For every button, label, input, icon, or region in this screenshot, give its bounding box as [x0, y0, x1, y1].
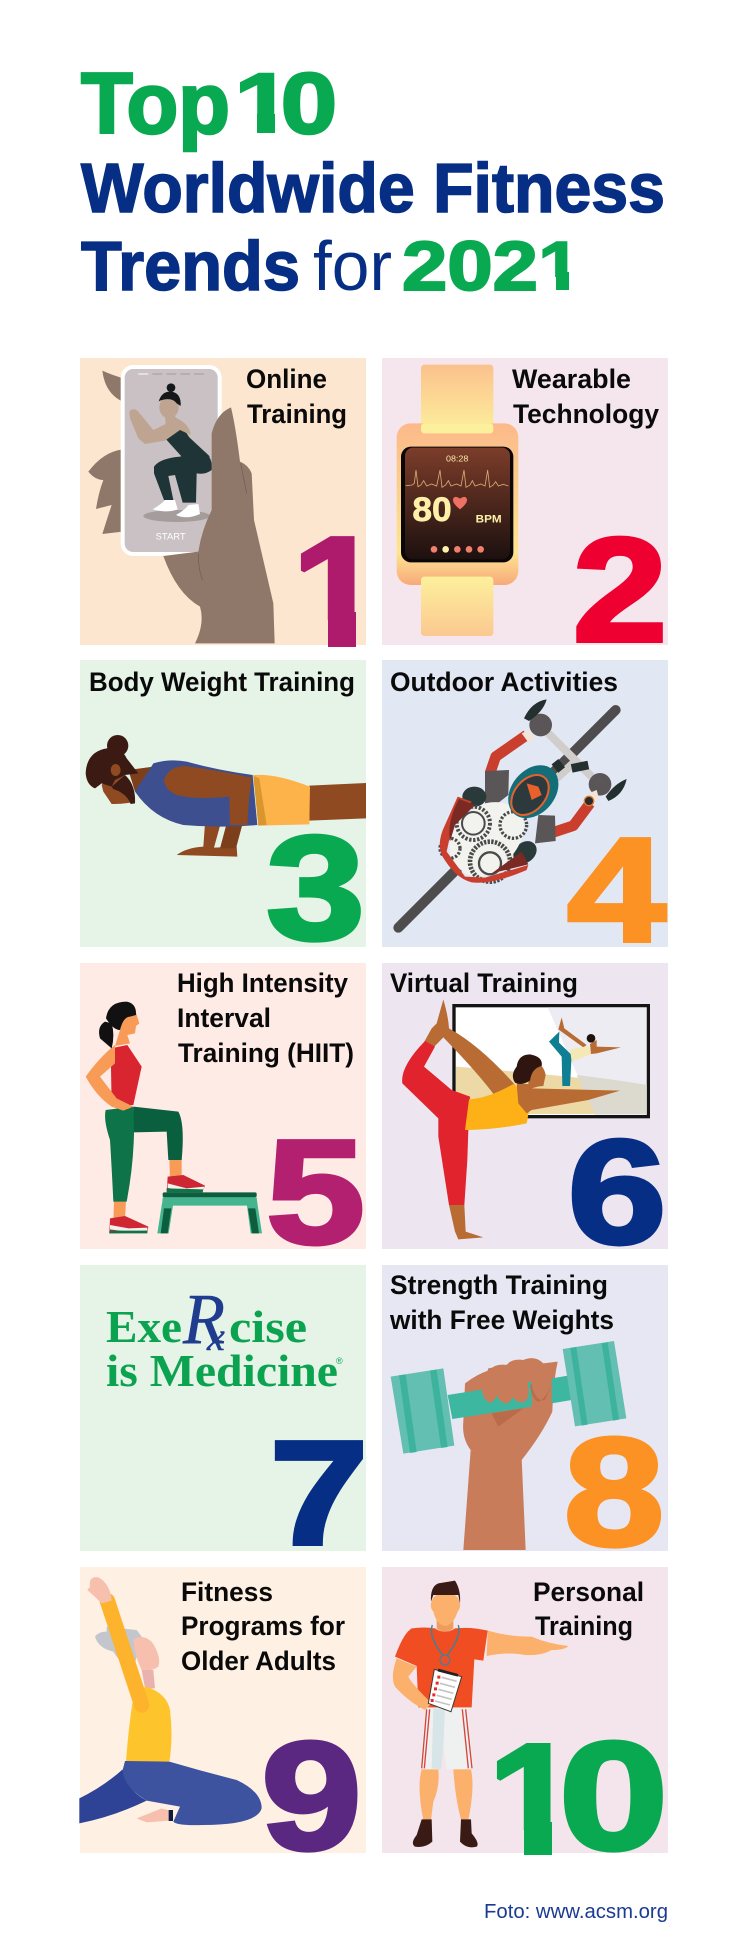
icon: cyclist from above — [398, 699, 627, 928]
label — [533, 1577, 644, 1641]
icon: yoga pose with screen — [402, 999, 648, 1239]
number 1: 1 — [292, 506, 383, 671]
panel: exercise is medicine — [80, 1265, 368, 1576]
panel: outdoor activities — [382, 660, 668, 973]
photo credit: Foto: www.acsm.org — [484, 1901, 668, 1923]
label: Interval — [177, 1003, 271, 1033]
number 5: 5 — [266, 1109, 365, 1275]
number 7: 7 — [270, 1410, 368, 1576]
label: Fitness — [181, 1577, 273, 1607]
label — [177, 968, 354, 1068]
label: High Intensity — [177, 968, 348, 998]
logo: Exercise is Medicine: R — [182, 1279, 225, 1359]
logo: Exercise is Medicine: Exe — [106, 1301, 182, 1352]
panel: virtual training — [382, 963, 668, 1275]
icon: smartwatch: 80 — [412, 491, 452, 529]
icon: smartwatch — [397, 365, 518, 636]
icon: older woman stretching — [79, 1577, 262, 1825]
logo: Exercise is Medicine: x — [206, 1314, 225, 1359]
number 1 — [300, 536, 356, 647]
label: Strength Training — [390, 1270, 608, 1300]
title: Top — [81, 56, 230, 152]
icon: smartwatch: BPM — [476, 513, 502, 525]
number 8: 8 — [564, 1406, 664, 1578]
icon: hand holding phone with squatting woman: START — [156, 531, 186, 541]
logo: Exercise is Medicine: ® — [336, 1356, 343, 1366]
label — [512, 364, 659, 429]
title: 202 — [402, 227, 538, 305]
label: Programs for — [181, 1611, 345, 1641]
number 3: 3 — [266, 805, 365, 971]
label: Personal — [533, 1577, 644, 1607]
number 10 — [496, 1740, 663, 1855]
logo: Exercise is Medicine — [106, 1279, 343, 1396]
panel: older adults — [79, 1567, 366, 1882]
panel: strength training — [382, 1265, 668, 1578]
panel: wearable technology — [382, 358, 668, 673]
title: Trends — [81, 227, 300, 305]
panel: online training — [80, 358, 366, 647]
title: Worldwide Fitness — [81, 149, 665, 227]
label: Virtual Training — [390, 968, 578, 998]
icon: fist holding dumbbell — [391, 1341, 626, 1550]
number 10: 0 — [559, 1710, 668, 1882]
label: Wearable — [512, 364, 631, 394]
number 9: 9 — [261, 1710, 362, 1882]
icon: smartwatch: 08:28 — [446, 455, 469, 464]
title: 1 — [232, 56, 294, 151]
icon: personal trainer with clipboard — [393, 1581, 568, 1847]
icon: woman stepping on platform — [86, 1002, 262, 1233]
panel: personal training — [382, 1567, 668, 1884]
title: for — [313, 227, 392, 305]
label: Online — [246, 364, 327, 394]
label: Training — [535, 1611, 633, 1641]
number 6: 6 — [568, 1109, 666, 1275]
label: Training (HIIT) — [178, 1038, 354, 1068]
logo: Exercise is Medicine: cise — [229, 1301, 307, 1352]
label: Training — [247, 399, 347, 429]
icon: hand holding phone with squatting woman — [88, 367, 275, 643]
title: 0 — [281, 55, 337, 151]
number 4: 4 — [567, 807, 666, 973]
label: Older Adults — [181, 1646, 336, 1676]
label — [389, 1270, 614, 1335]
title: 1 — [538, 226, 581, 305]
panel: HIIT — [80, 963, 366, 1275]
label — [181, 1577, 345, 1676]
number 10: 1 — [488, 1712, 579, 1884]
icon: man doing plank — [86, 735, 366, 857]
label — [246, 364, 347, 429]
panel: body weight training — [80, 660, 366, 971]
label: Outdoor Activities — [390, 667, 618, 697]
label: with Free Weights — [389, 1305, 614, 1335]
logo: Exercise is Medicine: is Medicine — [106, 1345, 338, 1396]
label: Technology — [513, 399, 659, 429]
number 2: 2 — [573, 507, 667, 673]
title — [80, 72, 663, 292]
label: Body Weight Training — [89, 667, 355, 697]
